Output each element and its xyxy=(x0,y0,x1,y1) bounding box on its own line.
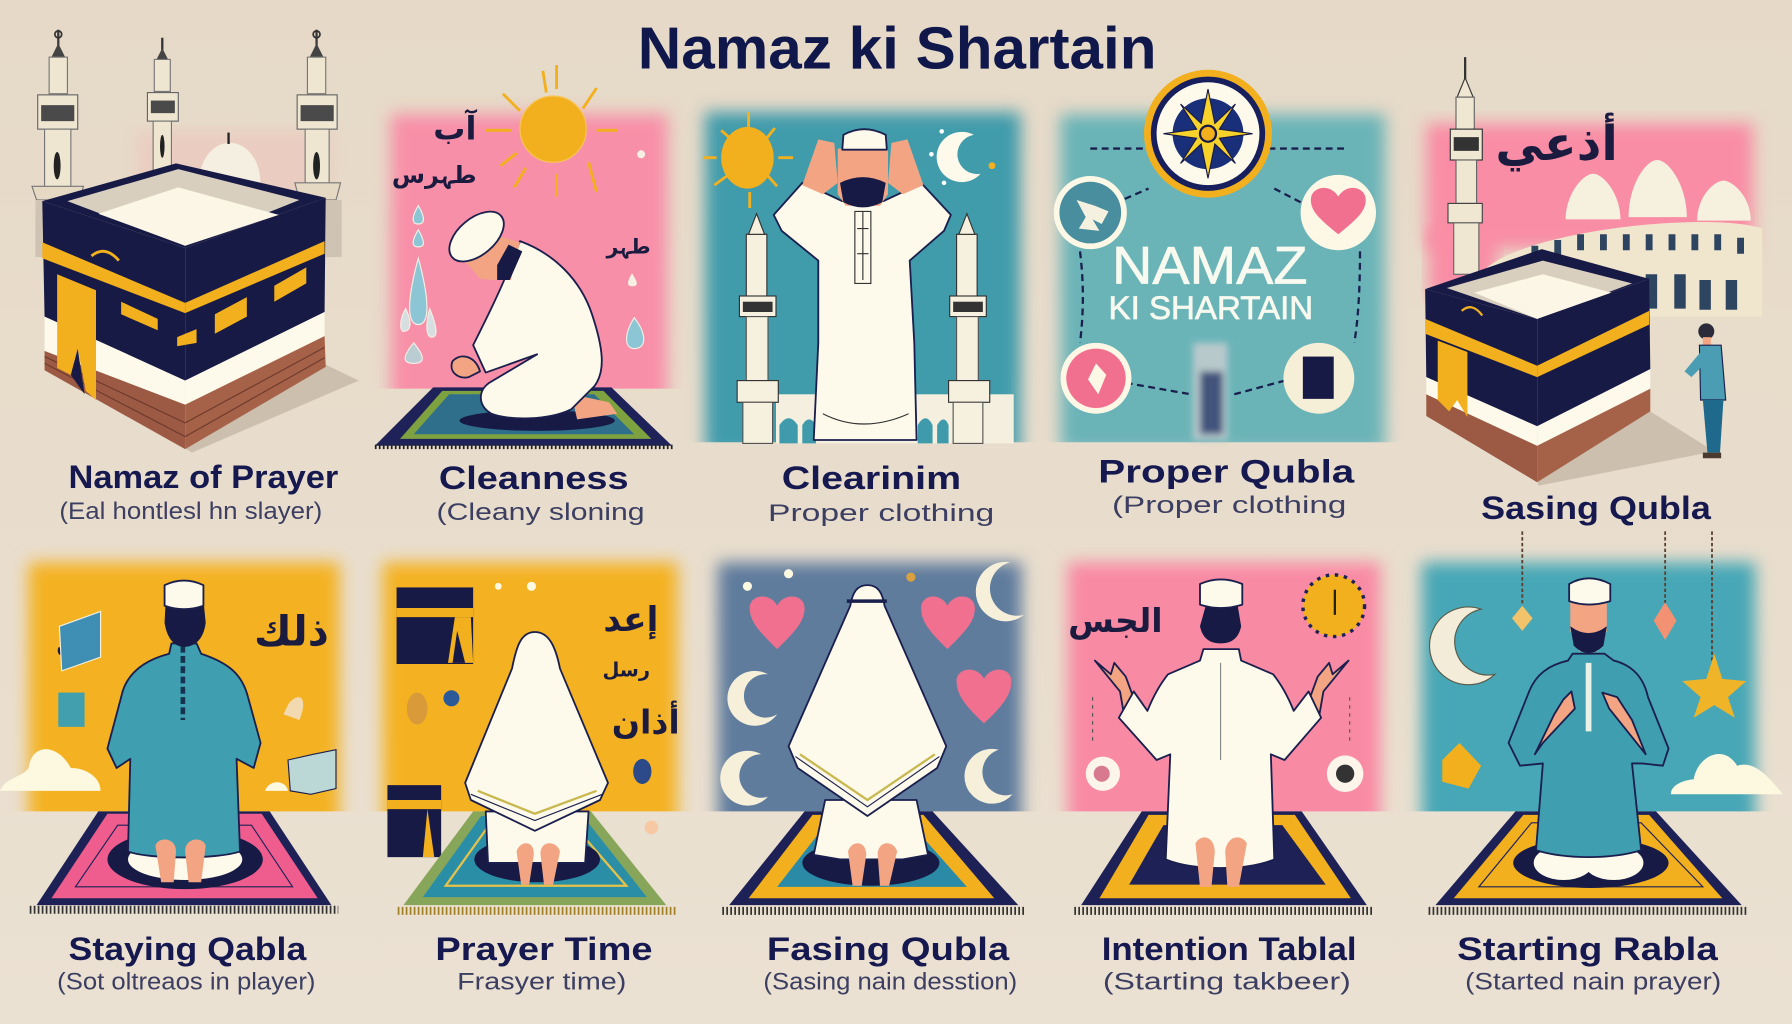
icon: compass xyxy=(1144,70,1272,198)
hanging circles xyxy=(1086,697,1363,792)
background: slate blue xyxy=(718,562,1022,831)
background: pink xyxy=(1067,562,1381,831)
label xyxy=(57,931,315,996)
star blob and cloud xyxy=(1442,743,1783,794)
arabic calligraphy and decorations xyxy=(407,582,680,834)
label: (Sot oltreaos in player) xyxy=(57,969,315,996)
label xyxy=(59,459,338,525)
icon circle: kaaba xyxy=(1283,343,1354,414)
label: Fasing Qubla xyxy=(767,931,1009,967)
small standing person xyxy=(1685,323,1726,458)
icon circle: pink xyxy=(1061,343,1131,414)
panel: Cleanness xyxy=(375,65,674,526)
arabic calligraphy: الجس xyxy=(1068,601,1163,640)
arabic calligraphy: طہر xyxy=(605,235,651,260)
person standing facing front xyxy=(1509,578,1669,888)
background: pink xyxy=(391,114,667,411)
Kaaba cube xyxy=(1425,249,1714,486)
background: yellow xyxy=(383,562,678,831)
label: (Cleany sloning xyxy=(437,499,645,526)
prayer rug xyxy=(1074,811,1374,911)
prayer rug xyxy=(722,811,1026,911)
arabic calligraphy: طہرس xyxy=(392,161,477,190)
crescent and moon xyxy=(1430,607,1495,685)
diagram title xyxy=(1109,236,1313,326)
arabic calligraphy and decorations: أذان xyxy=(612,701,680,742)
decorations: books clouds calligraphy: ذلك xyxy=(254,608,329,656)
label xyxy=(1457,931,1721,996)
mosque with domes xyxy=(1486,160,1762,317)
diagram title: KI SHARTAIN xyxy=(1109,290,1313,326)
label xyxy=(437,460,645,526)
minaret xyxy=(1448,57,1482,274)
background: teal xyxy=(705,112,1021,455)
person from behind xyxy=(107,581,263,889)
person with raised hands from behind xyxy=(1095,579,1349,887)
background: yellow xyxy=(29,562,339,831)
blurred figure xyxy=(1193,343,1227,440)
label: Frasyer time) xyxy=(457,969,626,996)
minarets behind Kaaba xyxy=(32,30,342,257)
hearts and crescents xyxy=(720,562,1024,806)
person kneeling and bowing xyxy=(440,202,617,431)
label xyxy=(1102,931,1357,996)
label: Intention Tablal xyxy=(1102,931,1357,967)
label: Cleanness xyxy=(439,460,629,496)
panel: Starting Rabla xyxy=(1422,531,1783,996)
label: Proper clothing xyxy=(768,500,994,527)
icon: sun and crescent xyxy=(703,112,995,208)
panel: Clearinim xyxy=(703,112,1021,527)
mosque minarets xyxy=(737,214,990,443)
icon circle: bird xyxy=(1054,176,1127,249)
person veiled from behind xyxy=(789,585,946,886)
label: Proper Qubla xyxy=(1098,453,1355,489)
arabic calligraphy: أذعي xyxy=(1495,112,1618,172)
hanging ornaments xyxy=(1512,531,1746,718)
arabic calligraphy xyxy=(392,108,651,260)
label: Staying Qabla xyxy=(69,931,307,967)
background: teal xyxy=(1422,562,1755,831)
panel: Proper Qubla diagram xyxy=(1054,70,1385,519)
decorations: books clouds calligraphy: ل xyxy=(56,624,81,659)
background: pink xyxy=(1426,123,1753,297)
water drops xyxy=(401,151,645,363)
label xyxy=(435,931,653,996)
panel: Fasing Qubla xyxy=(718,562,1026,996)
title: Namaz ki Shartain xyxy=(638,15,1157,82)
label: Starting Rabla xyxy=(1457,931,1718,967)
Kaaba cube xyxy=(42,163,326,449)
label: (Proper clothing xyxy=(1112,492,1346,519)
panel: Namaz of Prayer xyxy=(32,30,359,525)
label: (Sasing nain desstion) xyxy=(763,969,1017,996)
diagram title: NAMAZ xyxy=(1112,236,1307,295)
icon: numbered sun xyxy=(1303,575,1365,637)
label xyxy=(763,931,1017,996)
illustration: Kaaba with minarets xyxy=(32,30,359,453)
arabic calligraphy and decorations: رسل xyxy=(602,659,650,682)
dashed connectors xyxy=(1080,149,1360,394)
icon circle: heart xyxy=(1301,175,1376,250)
label xyxy=(1098,453,1355,519)
prayer rug xyxy=(30,811,338,910)
label: Sasing Qubla xyxy=(1481,490,1711,526)
arabic calligraphy and decorations: إعد xyxy=(603,600,658,640)
panel: Sasing Qubla xyxy=(1425,57,1762,526)
mini Kaaba icons xyxy=(387,587,473,857)
arabic calligraphy: آب xyxy=(433,108,477,147)
person raising hands to ears xyxy=(774,129,951,440)
decorations: books clouds calligraphy xyxy=(0,608,336,794)
panel: Intention Tablal xyxy=(1067,562,1381,996)
label: (Started nain prayer) xyxy=(1465,969,1721,996)
prayer rug xyxy=(1429,811,1749,911)
background: teal xyxy=(1061,114,1385,451)
icon: sun xyxy=(486,65,617,197)
label: Prayer Time xyxy=(435,931,653,967)
person veiled from behind xyxy=(465,632,608,885)
panel: Prayer Time xyxy=(383,562,680,996)
label: Clearinim xyxy=(782,460,961,496)
label xyxy=(768,460,994,527)
prayer rug xyxy=(375,387,674,447)
panel: Staying Qabla xyxy=(0,562,339,996)
prayer rug xyxy=(398,811,677,911)
label: (Eal hontlesl hn slayer) xyxy=(59,498,322,525)
label: (Starting takbeer) xyxy=(1103,969,1351,996)
label: Namaz of Prayer xyxy=(69,459,338,495)
